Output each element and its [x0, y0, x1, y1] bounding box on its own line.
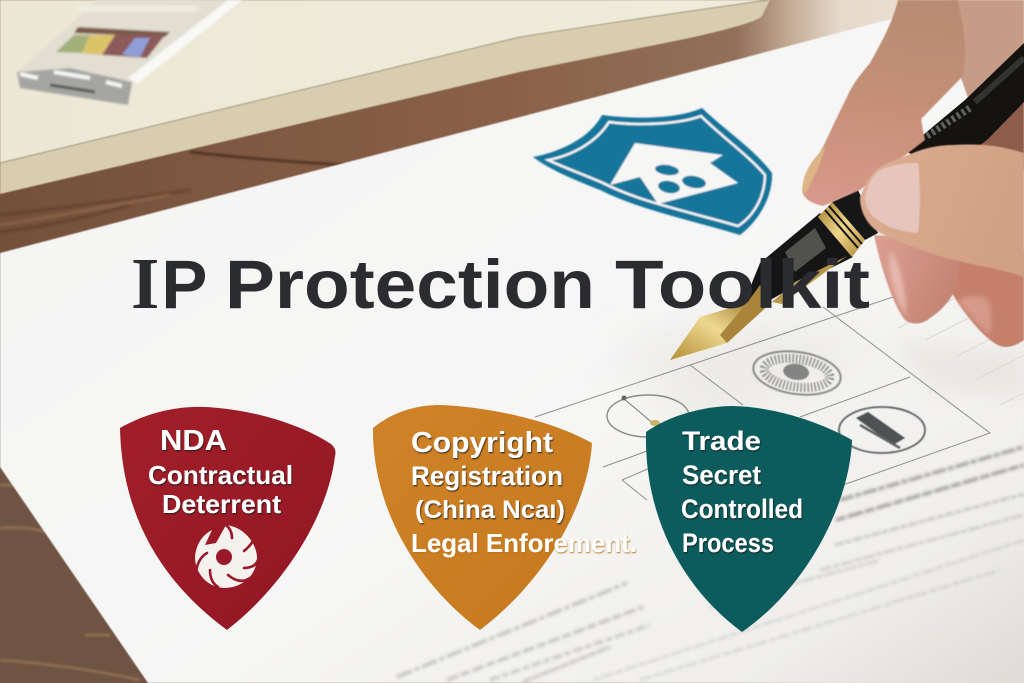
- NDA text: Deterrent: [162, 489, 281, 519]
- thumb: [860, 144, 1024, 277]
- lower ring finger: [950, 250, 1024, 347]
- title: [131, 243, 870, 324]
- title: IP: [131, 243, 207, 324]
- grip: [832, 190, 878, 240]
- Copyright text: [411, 427, 637, 558]
- middle finger: [874, 235, 960, 324]
- Copyright text: Registration: [411, 461, 563, 491]
- Trade Secret text: Process: [682, 528, 774, 558]
- fountain pen: [670, 43, 1024, 360]
- icon: swirl: [195, 525, 258, 588]
- Copyright text: Legal Enforement.: [411, 528, 637, 558]
- seal: left circle: [607, 395, 689, 437]
- seal: top emblem: [751, 346, 843, 400]
- shield: Trade Secret: [646, 406, 852, 632]
- nib: [670, 303, 755, 360]
- form with seal boxes: [535, 262, 1024, 500]
- silver USB drive on notebook: [17, 0, 245, 105]
- house symbol: [610, 143, 738, 204]
- NDA text: Contractual: [148, 460, 293, 490]
- Trade Secret text: [681, 426, 803, 558]
- Trade Secret text: Secret: [682, 460, 761, 490]
- Trade Secret text: Trade: [682, 426, 761, 456]
- pen barrel: [905, 43, 1024, 175]
- blurred contract body text: [397, 447, 1024, 682]
- title: Toolkit: [615, 246, 870, 323]
- shield: NDA: [120, 407, 336, 630]
- index finger and thumb: [802, 0, 1024, 277]
- NDA text: NDA: [160, 425, 227, 457]
- back of hand above pen: [950, 0, 1024, 98]
- notebook: [0, 0, 770, 194]
- seal: right building: [839, 407, 925, 453]
- Copyright text: Copyright: [411, 427, 553, 459]
- NDA text: [148, 425, 293, 519]
- Copyright text: (China Ncaı): [415, 496, 565, 524]
- Trade Secret text: Controlled: [681, 494, 803, 524]
- shield: Copyright: [373, 405, 637, 630]
- top shield icon: [533, 108, 772, 235]
- title: Protection: [225, 246, 595, 323]
- index finger: [802, 0, 965, 206]
- gold rings: [818, 202, 865, 257]
- hand: rear fingers: [874, 0, 1024, 347]
